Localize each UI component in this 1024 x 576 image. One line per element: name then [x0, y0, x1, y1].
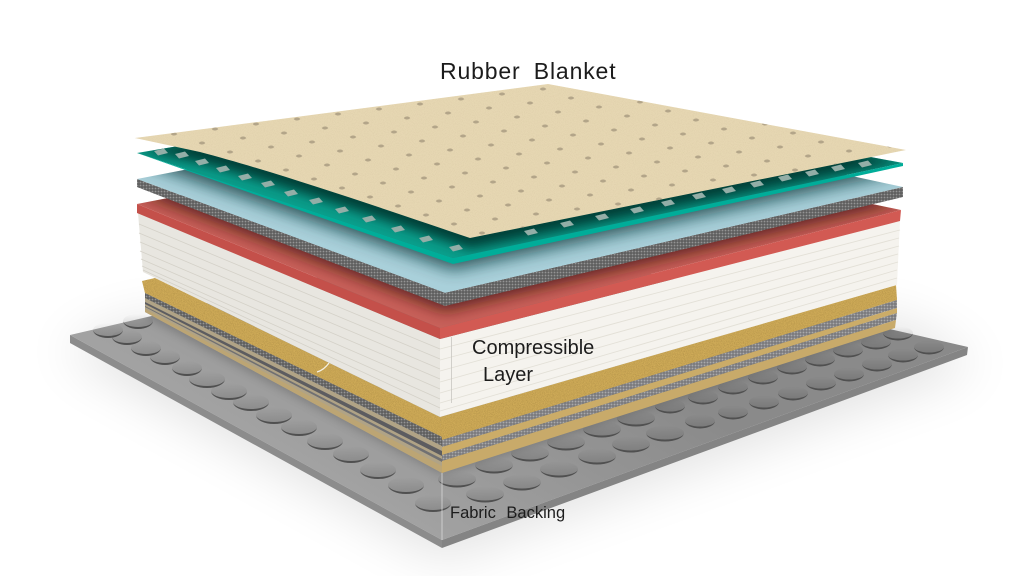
- left face base: [145, 293, 442, 473]
- panel: fabric backing plate with discs: [70, 274, 968, 548]
- red shading: [142, 196, 899, 320]
- right face grey band lower: [442, 313, 897, 461]
- red top: [137, 130, 901, 328]
- sheet perforation dots: [135, 84, 906, 238]
- plate right edge: [442, 347, 968, 548]
- compressible leader line: [450, 337, 452, 403]
- panel: compressible layer block: [138, 213, 900, 417]
- title: Rubber Blanket: Rubber Blanket: [440, 58, 616, 84]
- soft floor shadow: [60, 320, 980, 560]
- red left edge: [137, 204, 440, 339]
- label: Fabric Backing: Fabric Backing: [450, 504, 565, 522]
- teal right lip: [453, 163, 903, 264]
- backing leader line: [441, 473, 443, 540]
- teal top: [137, 90, 903, 258]
- block right stripes: [440, 230, 900, 411]
- panel: teal layer: [137, 146, 903, 264]
- right face sand band lower: [442, 320, 896, 473]
- blue top: [137, 105, 903, 293]
- block left face: [138, 213, 440, 417]
- block right face: [440, 221, 900, 417]
- teal left lip: [137, 153, 453, 264]
- right face sand band middle: [442, 308, 897, 455]
- teal shading: [138, 146, 902, 256]
- blue left edge: [137, 179, 445, 306]
- label: Layer: Layer: [483, 364, 533, 386]
- blue shading: [149, 170, 892, 280]
- right face grey band upper: [442, 300, 897, 447]
- panel: beige perforated top sheet: [135, 84, 906, 238]
- discs: [93, 314, 944, 512]
- left face stripes: [145, 293, 442, 473]
- plate top: [70, 237, 968, 540]
- sheet surface: [135, 84, 906, 238]
- panel: blue layer: [137, 170, 903, 306]
- blue right edge: [445, 187, 903, 306]
- panel: sand and grey laminated layers: [142, 278, 897, 473]
- block left stripes: [139, 224, 440, 408]
- panel: red layer: [137, 196, 901, 339]
- plate left edge: [70, 335, 442, 548]
- red right edge: [440, 210, 901, 339]
- label: Compressible: Compressible: [472, 337, 594, 359]
- teal square perforations: [154, 148, 872, 252]
- stack shadow on plate: [146, 303, 892, 476]
- sand top surface left: [142, 278, 442, 437]
- tick mark on sand: [317, 363, 329, 372]
- right face sand bands: [440, 285, 897, 440]
